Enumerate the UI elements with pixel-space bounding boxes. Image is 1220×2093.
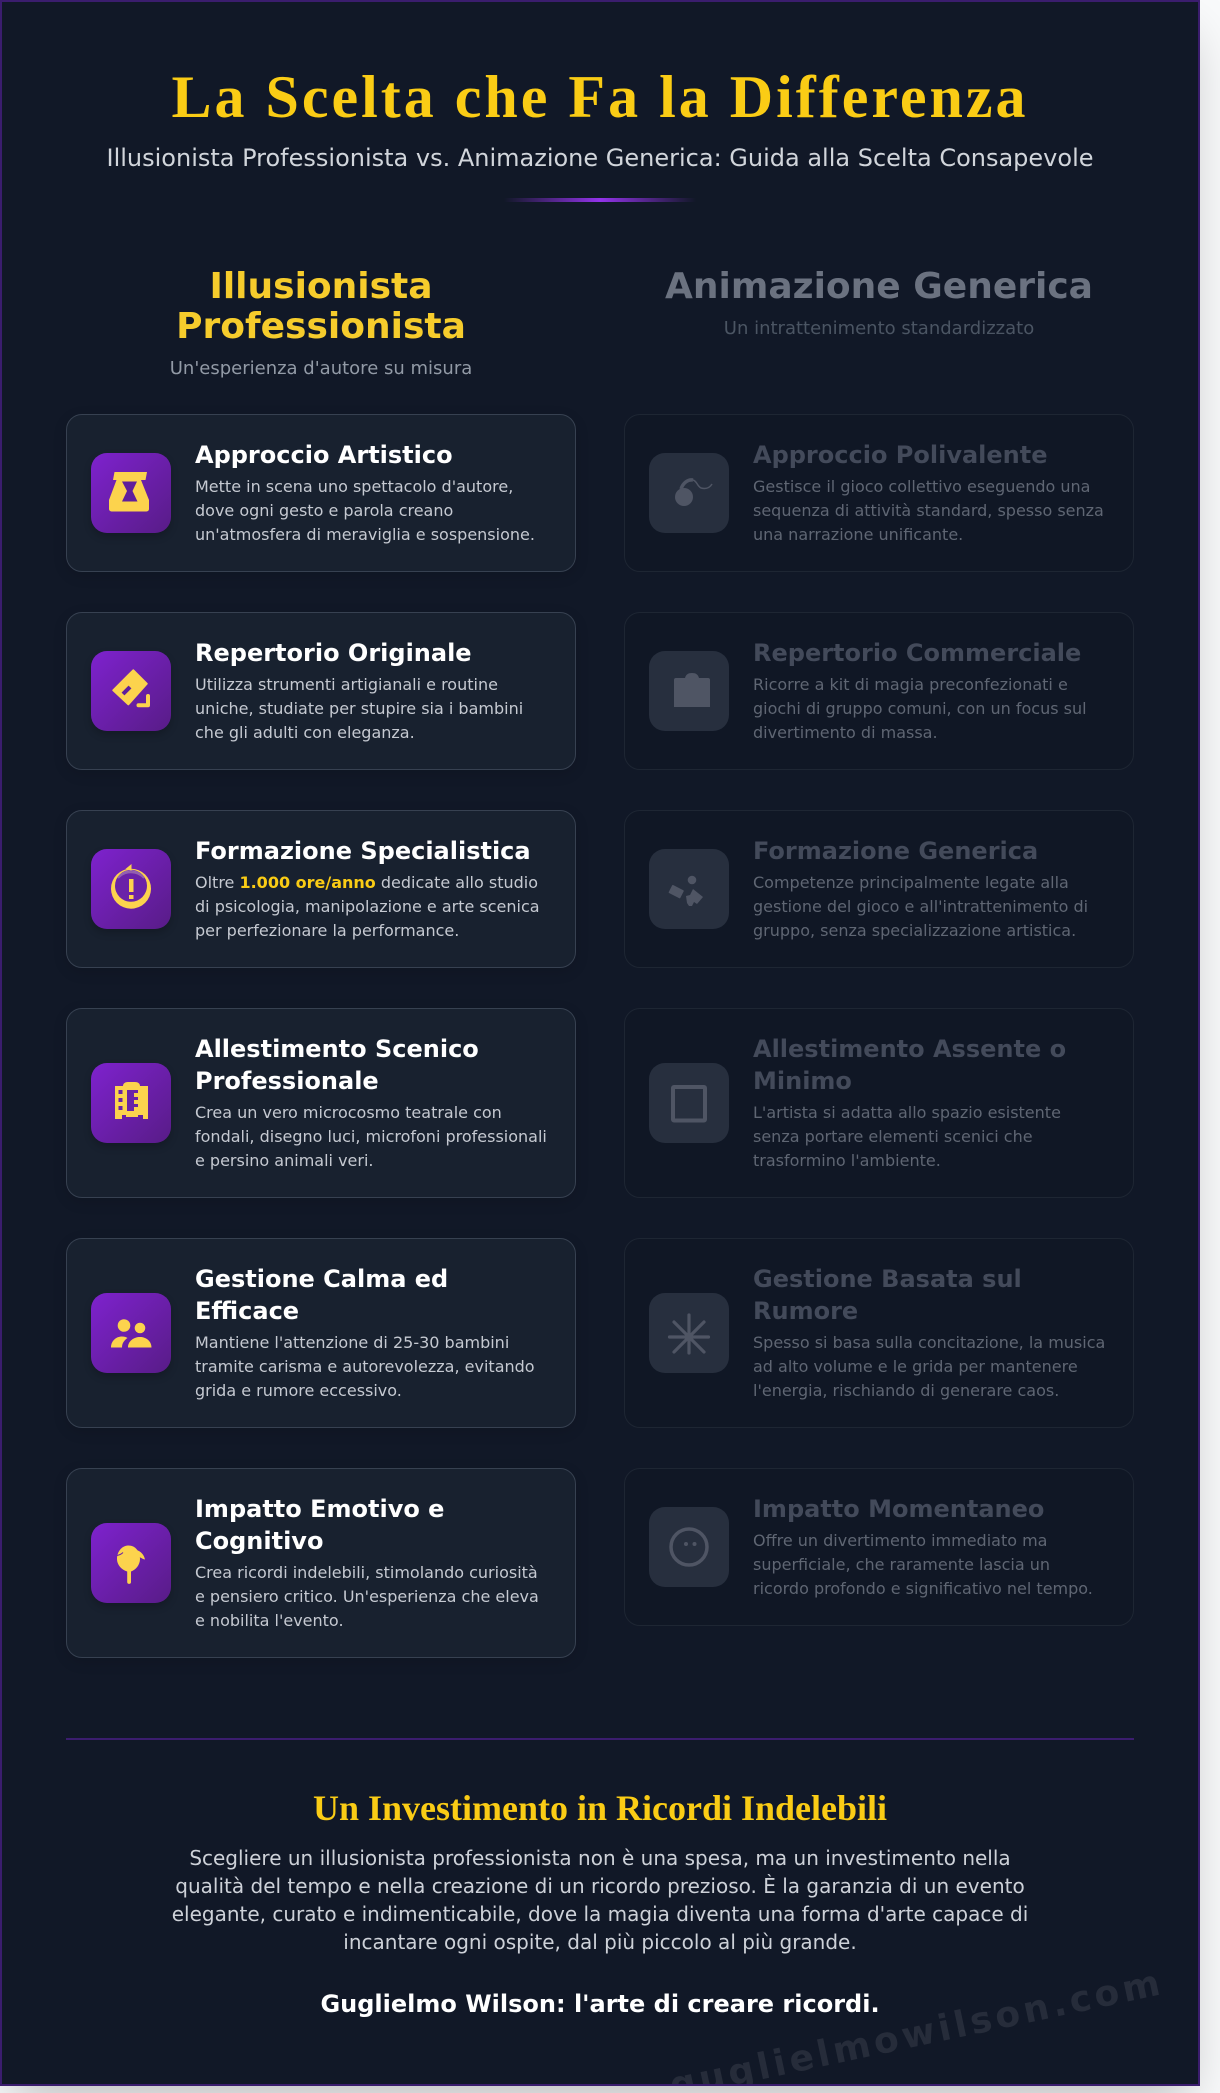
card: Repertorio Commerciale	[624, 612, 1134, 770]
icon: clock with exclamation	[91, 849, 171, 929]
text: Approccio Artistico: Mette in scena uno spettacolo d'autore, dove ogni gesto e parola creano un'atmosfera di meraviglia e sospensione.	[195, 477, 535, 544]
icon: empty square	[649, 1063, 729, 1143]
icon: film strip	[91, 1063, 171, 1143]
text: Allestimento Assente o Minimo: Allestimento Assente o Minimo	[753, 1035, 1066, 1095]
text: Formazione Specialistica: Oltre 1.000 ore/anno dedicate allo studio di psicologia, manipolazione e arte scenica per perfezionare la performance.	[195, 873, 540, 940]
text: Gestione Basata sul Rumore: Spesso si basa sulla concitazione, la musica ad alto volume e le grida per mantenere l'energia, rischiando di generare caos.	[753, 1333, 1105, 1400]
subtitle: Illusionista Professionista vs. Animazione Generica: Guida alla Scelta Consapevole	[106, 144, 1094, 172]
text: Gestione Basata sul Rumore: Gestione Basata sul Rumore	[753, 1265, 1022, 1325]
card: Approccio Artistico	[66, 414, 576, 572]
text: Impatto Emotivo e Cognitivo	[195, 1495, 539, 1630]
text: Impatto Emotivo e Cognitivo: Crea ricordi indelebili, stimolando curiosità e pensiero critico. Un'esperienza che eleva e nobilita l'evento.	[195, 1563, 539, 1630]
card: Gestione Basata sul Rumore	[624, 1238, 1134, 1428]
text: Formazione Specialistica	[195, 837, 540, 940]
icon: asterisk	[649, 1293, 729, 1373]
text: Impatto Momentaneo: Offre un divertimento immediato ma superficiale, che raramente lascia un ricordo profondo e significativo nel tempo.	[753, 1531, 1093, 1598]
footer paragraph: Scegliere un illusionista professionista non è una spesa, ma un investimento nella qualità del tempo e nella creazione di un ricordo prezioso. È la garanzia di un evento elegante, curato e indimenticabile, dove la magia diventa una forma d'arte capace di incantare ogni ospite, dal più piccolo al più grande.	[172, 1846, 1028, 1954]
text: Allestimento Scenico Professionale: Crea un vero microcosmo teatrale con fondali, disegno luci, microfoni professionali e persino animali veri.	[195, 1103, 547, 1170]
text: Repertorio Commerciale: Ricorre a kit di magia preconfezionati e giochi di gruppo comuni, con un focus sul divertimento di massa.	[753, 675, 1087, 742]
text: Gestione Basata sul Rumore	[753, 1265, 1105, 1400]
card: Gestione Calma ed Efficace	[66, 1238, 576, 1428]
card: Impatto Momentaneo	[624, 1468, 1134, 1626]
icon: scattered shapes	[649, 849, 729, 929]
text: Gestione Calma ed Efficace: Mantiene l'attenzione di 25-30 bambini tramite carisma e autorevolezza, evitando grida e rumore eccessivo.	[195, 1333, 535, 1400]
card: Impatto Emotivo e Cognitivo	[66, 1468, 576, 1658]
column heading: Animazione Generica: Animazione Generica	[665, 266, 1093, 307]
footer signature: Guglielmo Wilson: l'arte di creare ricordi.	[320, 1990, 880, 2018]
text: Repertorio Commerciale	[753, 639, 1087, 742]
footer divider	[66, 1738, 1134, 1740]
text: Repertorio Originale	[195, 639, 523, 742]
icon: neutral face	[649, 1507, 729, 1587]
text: Allestimento Assente o Minimo: L'artista si adatta allo spazio esistente senza portare elementi scenici che trasformino l'ambiente.	[753, 1103, 1061, 1170]
text: Formazione Generica: Formazione Generica	[753, 837, 1038, 865]
text: Impatto Momentaneo: Impatto Momentaneo	[753, 1495, 1044, 1523]
icon: people	[91, 1293, 171, 1373]
text: Approccio Polivalente: Approccio Polivalente	[753, 441, 1048, 469]
text: Gestione Calma ed Efficace	[195, 1265, 535, 1400]
text: Repertorio Originale: Repertorio Originale	[195, 639, 472, 667]
column heading: Animazione Generica	[665, 266, 1093, 339]
text: Approccio Artistico	[195, 441, 535, 544]
header divider	[504, 198, 696, 202]
icon: whistle	[649, 453, 729, 533]
card: Formazione Specialistica	[66, 810, 576, 968]
text: Allestimento Scenico Professionale	[195, 1035, 547, 1170]
card: Allestimento Scenico Professionale	[66, 1008, 576, 1198]
card: Allestimento Assente o Minimo	[624, 1008, 1134, 1198]
icon: case	[649, 651, 729, 731]
icon: tag with check	[91, 651, 171, 731]
text: Repertorio Originale: Utilizza strumenti artigianali e routine uniche, studiate per stupire sia i bambini che gli adulti con eleganza.	[195, 675, 523, 742]
card: Repertorio Originale	[66, 612, 576, 770]
footer heading: Un Investimento in Ricordi Indelebili	[313, 1788, 887, 1828]
text: Repertorio Commerciale: Repertorio Commerciale	[753, 639, 1081, 667]
column heading: Illusionista Professionista: Un'esperienza d'autore su misura	[170, 358, 472, 379]
text: Approccio Polivalente	[753, 441, 1104, 544]
text: Formazione Generica: Competenze principalmente legate alla gestione del gioco e all'intrattenimento di gruppo, senza specializzazione artistica.	[753, 873, 1088, 940]
text: Approccio Artistico: Approccio Artistico	[195, 441, 453, 469]
text: Formazione Specialistica: Formazione Specialistica	[195, 837, 531, 865]
icon: head profile	[91, 1523, 171, 1603]
text: Impatto Emotivo e Cognitivo: Impatto Emotivo e Cognitivo	[195, 1495, 444, 1555]
column heading: Illusionista Professionista	[170, 266, 472, 379]
text: Impatto Momentaneo	[753, 1495, 1093, 1598]
icon: hourglass vessel	[91, 453, 171, 533]
text: Allestimento Assente o Minimo	[753, 1035, 1066, 1170]
card: Approccio Polivalente	[624, 414, 1134, 572]
text: Gestione Calma ed Efficace: Gestione Calma ed Efficace	[195, 1265, 448, 1325]
title: La Scelta che Fa la Differenza	[171, 64, 1029, 130]
card: Formazione Generica	[624, 810, 1134, 968]
column heading: Animazione Generica: Un intrattenimento standardizzato	[724, 318, 1034, 339]
text: Formazione Generica	[753, 837, 1088, 940]
text: Approccio Polivalente: Gestisce il gioco collettivo eseguendo una sequenza di attività standard, spesso senza una narrazione unificante.	[753, 477, 1104, 544]
text: Allestimento Scenico Professionale: Allestimento Scenico Professionale	[195, 1035, 479, 1095]
column heading: Illusionista Professionista: Illusionista Professionista	[176, 266, 466, 347]
